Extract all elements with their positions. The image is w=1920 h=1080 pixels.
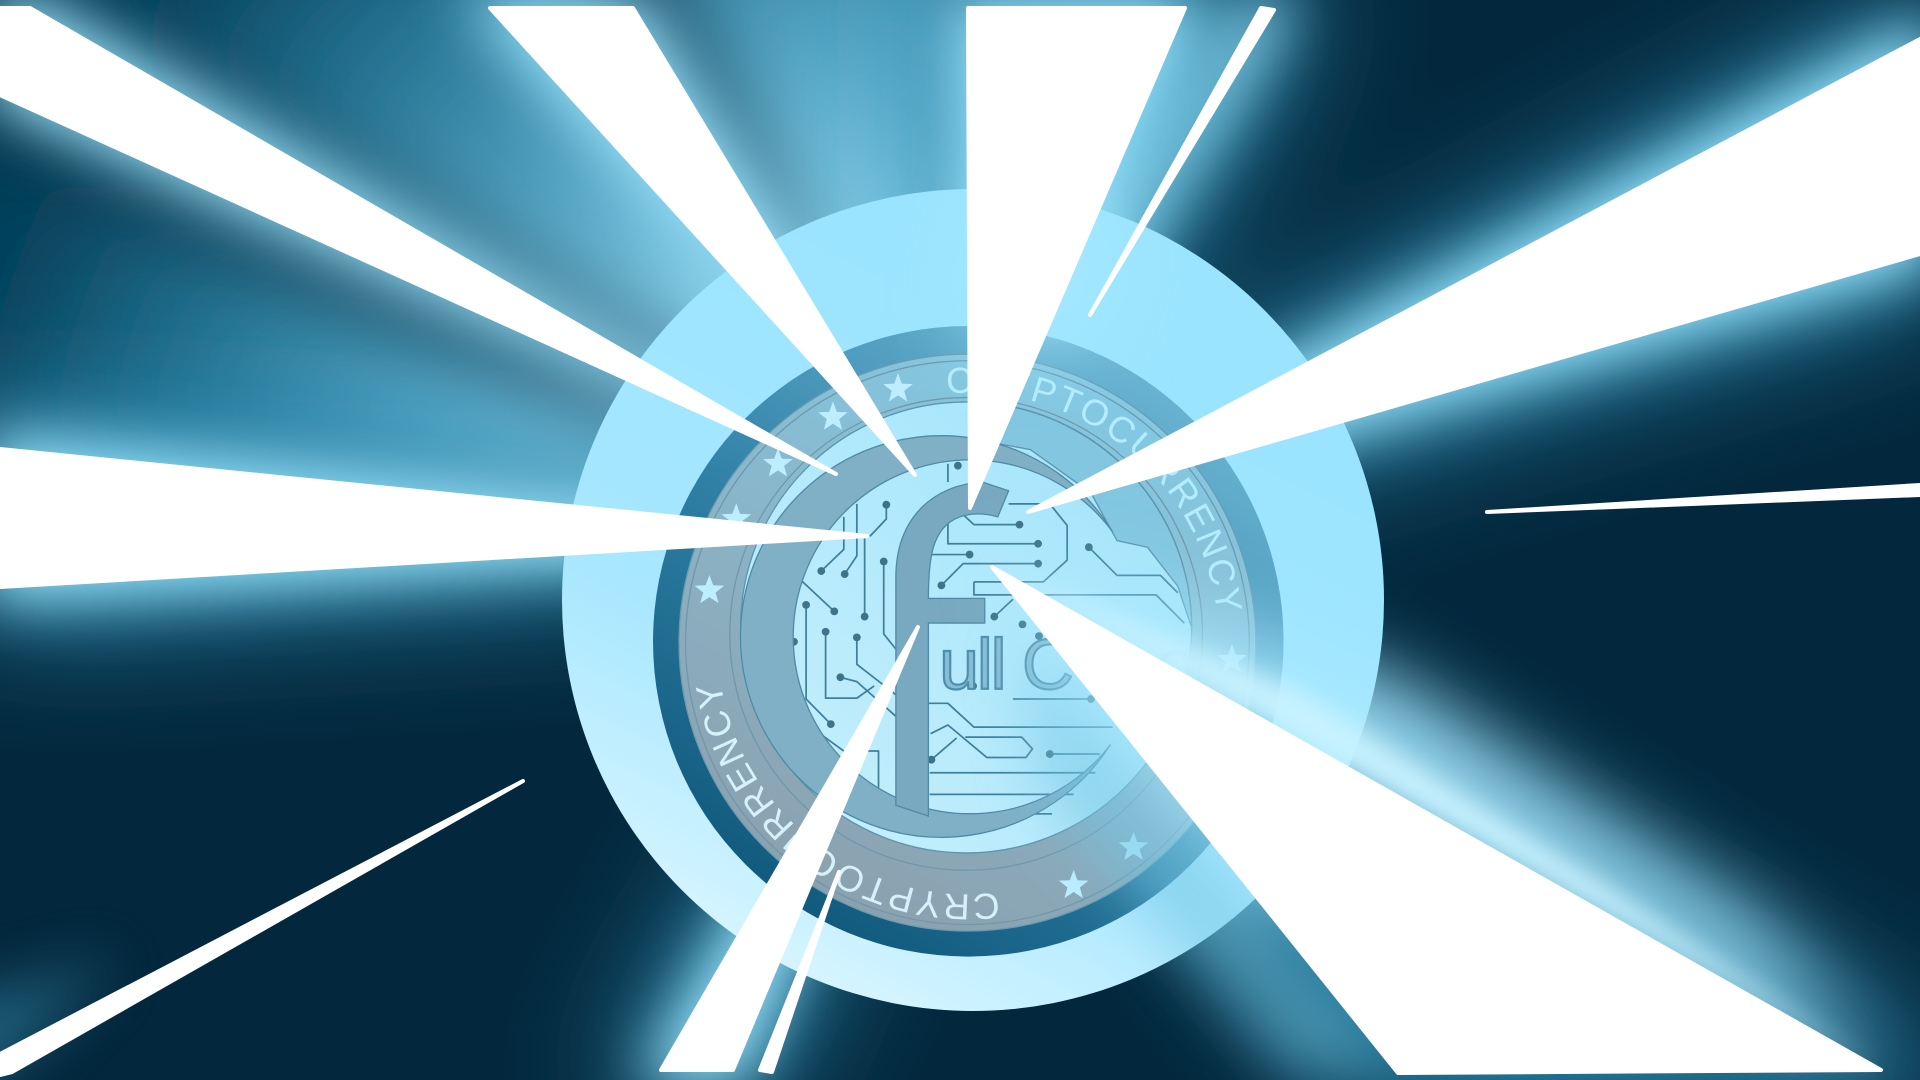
coin engraved band xyxy=(679,354,1256,931)
faint glow under lower right ray xyxy=(1020,640,1400,1075)
light disc behind coin xyxy=(562,189,1384,1011)
coin: oo xyxy=(1115,625,1194,705)
ray: thin right xyxy=(1487,485,1920,512)
upper right band segment xyxy=(996,404,1192,627)
ray: thin lower left xyxy=(0,781,523,1075)
bright streak beside lower right ray xyxy=(992,567,1883,1072)
ray: top centre left xyxy=(490,8,915,475)
ray: lower right xyxy=(992,567,1881,1073)
circuit nodes xyxy=(790,462,1095,764)
C crescent logo xyxy=(740,436,1113,837)
f logo letter xyxy=(896,482,1009,816)
logo wordmark: ull C xyxy=(939,625,1074,705)
ray: upper right xyxy=(1028,39,1920,512)
glow at lower left thin ray xyxy=(0,960,120,1080)
ray: bottom xyxy=(661,627,918,1070)
ray: thin bottom xyxy=(760,872,839,1072)
coin light face xyxy=(741,402,1192,853)
ring stars xyxy=(695,373,1247,898)
ray: top centre xyxy=(968,8,1185,508)
ring lettering xyxy=(947,393,1219,643)
circuit traces xyxy=(790,464,1184,814)
ray: left xyxy=(0,449,867,587)
coin outer rim xyxy=(653,326,1284,957)
ray: thin top xyxy=(1090,8,1274,315)
background glow fans xyxy=(0,0,970,530)
ray: top left xyxy=(0,8,836,474)
coin xyxy=(653,326,1284,957)
glow over coin xyxy=(970,190,1883,1072)
top ring text: CRYPTOCURRENCY xyxy=(948,368,1242,609)
bottom ring text: CRYPTOCURRENCY xyxy=(696,688,998,920)
